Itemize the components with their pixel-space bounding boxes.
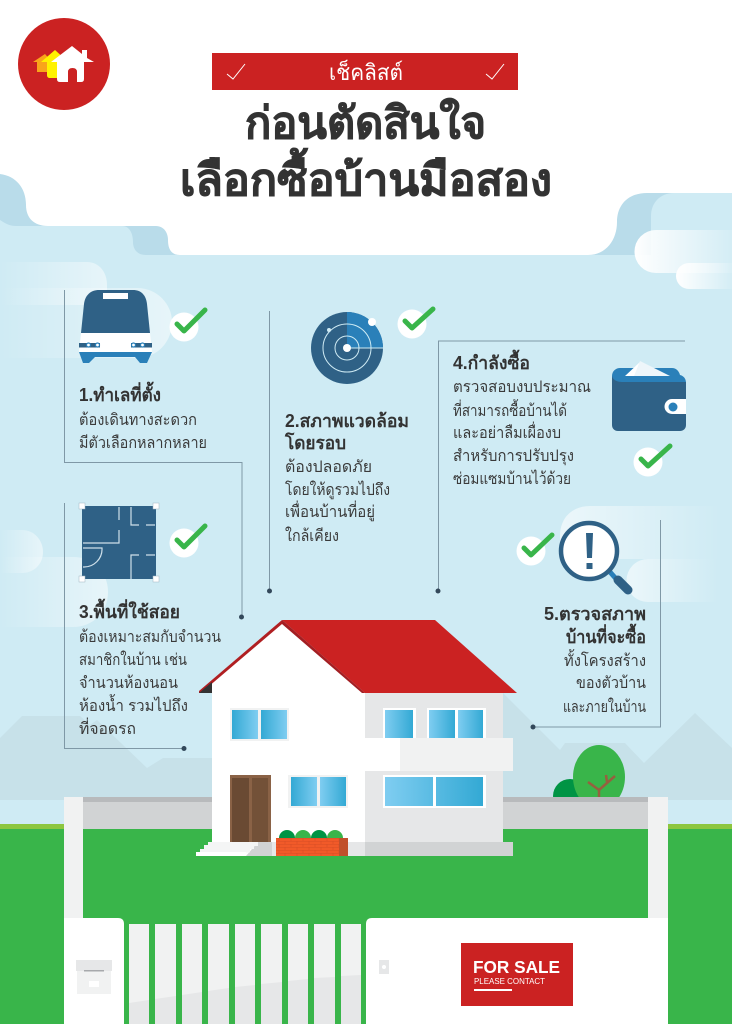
text: location: 1.ทำเลที่ตั้ง (79, 381, 161, 405)
text: purchasing power: 4.กำลังซื้อ (453, 349, 530, 373)
icon: magnifier (561, 523, 628, 590)
icon: floor plan (79, 503, 159, 582)
house walls (212, 623, 513, 856)
background sky (0, 255, 732, 835)
text: surroundings: ต้องปลอดภัย (285, 458, 372, 476)
text: usable area: ห้องน้ำ รวมไปถึง (79, 694, 188, 715)
text: usable area: จำนวนห้องนอน (79, 674, 178, 692)
check 1 (170, 310, 205, 342)
text: location: ต้องเดินทางสะดวก (79, 411, 197, 429)
for sale sign: FOR SALE (473, 957, 560, 977)
title (180, 97, 552, 205)
tree (553, 745, 625, 813)
house (196, 620, 517, 856)
text: surroundings: เพื่อนบ้านที่อยู่ (285, 500, 375, 522)
ground and fence wall (0, 797, 732, 1024)
checklist banner: เช็คลิสต์ (329, 58, 403, 85)
text: surroundings: 2.สภาพแวดล้อม (285, 411, 409, 431)
for sale sign: PLEASE CONTACT (474, 977, 545, 986)
text: inspect house: บ้านที่จะซื้อ (566, 623, 646, 647)
text: purchasing power: ซ่อมแซมบ้านไว้ด้วย (453, 469, 571, 488)
checklist banner (212, 53, 518, 90)
text: inspect house: และภายในบ้าน (563, 697, 646, 716)
title: เลือกซื้อบ้านมือสอง (180, 147, 552, 205)
text: purchasing power: ตรวจสอบงบประมาณ (453, 379, 591, 396)
text: surroundings (284, 411, 409, 545)
text: purchasing power (453, 349, 591, 488)
check 2 (398, 309, 433, 338)
connector lines (64, 290, 685, 751)
text: surroundings: โดยให้ดูรวมไปถึง (285, 480, 390, 500)
text: usable area: 3.พื้นที่ใช้สอย (79, 598, 180, 622)
text: usable area (79, 598, 221, 738)
check 4 (634, 446, 670, 476)
gate latch (379, 960, 389, 974)
roof (199, 620, 517, 693)
door (230, 775, 271, 842)
text: usable area: ต้องเหมาะสมกับจำนวน (79, 628, 221, 646)
text: inspect house (544, 604, 646, 716)
title: ก่อนตัดสินใจ (245, 97, 486, 148)
text: inspect house: ทั้งโครงสร้าง (564, 649, 646, 670)
check 5 (516, 535, 552, 566)
text: purchasing power: สำหรับการปรับปรุง (453, 448, 574, 466)
steps (196, 842, 272, 856)
text: surroundings: โดยรอบ (284, 432, 346, 453)
text: inspect house: ของตัวบ้าน (576, 674, 646, 692)
clouds at top (0, 174, 732, 627)
text: location (79, 381, 207, 452)
text: purchasing power: ที่สามารถซื้อบ้านได้ (453, 399, 567, 420)
text: usable area: สมาชิกในบ้าน เช่น (79, 650, 187, 669)
text: location: มีตัวเลือกหลากหลาย (79, 434, 207, 452)
icon: wallet (612, 361, 686, 431)
text: inspect house: 5.ตรวจสภาพ (544, 604, 646, 624)
mailbox (76, 960, 112, 994)
logo (18, 18, 110, 110)
for sale sign (461, 943, 573, 1006)
text: surroundings: ใกล้เคียง (285, 526, 339, 545)
icon: radar (311, 312, 383, 384)
windows (230, 708, 486, 808)
text: purchasing power: และอย่าลืมเผื่องบ (453, 421, 561, 442)
gate and front panels (64, 918, 668, 1024)
planter with bushes (276, 830, 348, 856)
check 3 (170, 526, 205, 558)
text: usable area: ที่จอดรถ (79, 717, 136, 738)
mountains (0, 693, 732, 800)
icon: train (79, 290, 152, 363)
